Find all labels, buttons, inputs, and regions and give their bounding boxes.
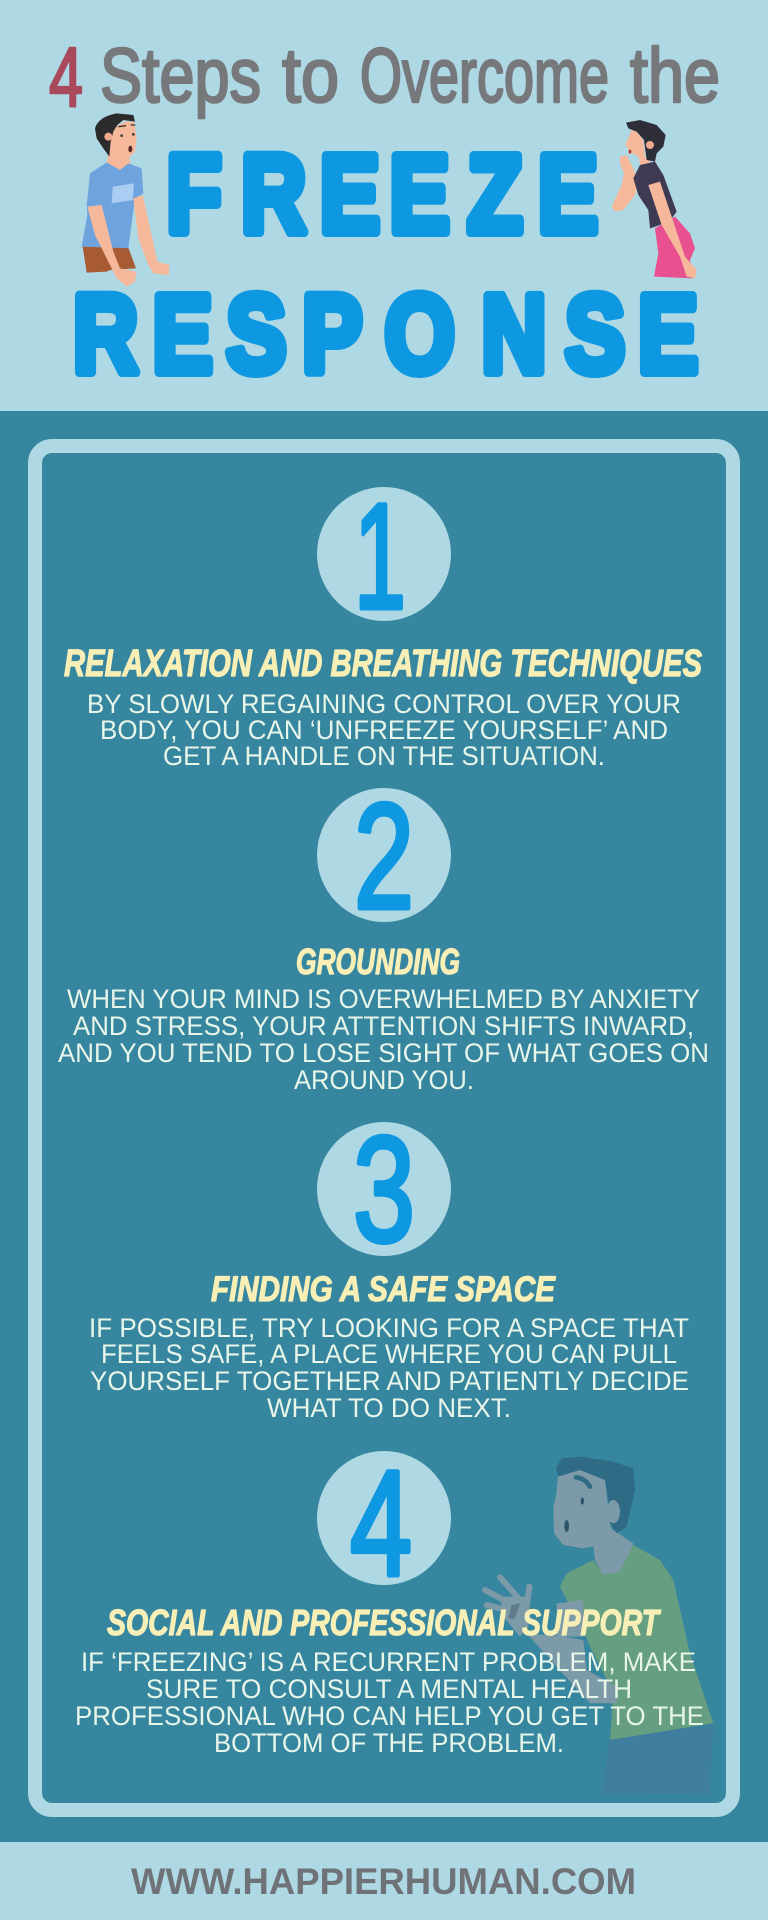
step 4 number badge: 4 (350, 1439, 412, 1607)
step 3 body: YOURSELF TOGETHER AND PATIENTLY DECIDE (90, 1366, 689, 1396)
step 1 body: BODY, YOU CAN ‘UNFREEZE YOURSELF’ AND (100, 715, 668, 745)
step 4 body: PROFESSIONAL WHO CAN HELP YOU GET TO THE (75, 1701, 704, 1731)
step 1 number badge: 1 (354, 472, 406, 640)
title line: 4 Steps to Overcome the: the (630, 33, 720, 119)
heading: FREEZE: FREEZE (166, 134, 598, 256)
header background (0, 0, 768, 411)
step 4 body (75, 1647, 704, 1758)
step 2 body: AND STRESS, YOUR ATTENTION SHIFTS INWARD, (73, 1011, 694, 1041)
step 1 body: BY SLOWLY REGAINING CONTROL OVER YOUR (87, 689, 681, 719)
step 2 number badge (317, 772, 451, 940)
title line: 4 Steps to Overcome the: Steps (100, 33, 261, 119)
footer website URL: WWW.HAPPIERHUMAN.COM (131, 1861, 636, 1902)
icon: surprised man in blue shirt (82, 113, 169, 287)
step 3 body: IF POSSIBLE, TRY LOOKING FOR A SPACE THAT (89, 1313, 689, 1343)
step 2 body (58, 984, 709, 1095)
step 2 number badge: 2 (354, 772, 414, 940)
title line: 4 Steps to Overcome the: to (282, 33, 339, 119)
step 1 body: GET A HANDLE ON THE SITUATION. (163, 741, 605, 771)
title line: 4 Steps to Overcome the: 4 (49, 30, 83, 124)
step 2 body: AROUND YOU. (294, 1065, 474, 1095)
step 2 body: WHEN YOUR MIND IS OVERWHELMED BY ANXIETY (67, 984, 700, 1014)
panel: rounded frame with steps (35, 446, 733, 1810)
step 4 body: BOTTOM OF THE PROBLEM. (214, 1728, 564, 1758)
title line: 4 Steps to Overcome the (49, 30, 720, 124)
step 1 body (87, 689, 681, 771)
step 3 number badge: 3 (353, 1105, 415, 1273)
step 4 body: SURE TO CONSULT A MENTAL HEALTH (146, 1674, 632, 1704)
step 2 heading: GROUNDING (296, 941, 460, 982)
step 3 body: WHAT TO DO NEXT. (267, 1393, 511, 1423)
main teal background (0, 411, 768, 1842)
title line: 4 Steps to Overcome the: Overcome (360, 33, 609, 119)
step 4 number badge (317, 1439, 451, 1607)
step 3 heading: FINDING A SAFE SPACE (211, 1270, 556, 1309)
step 1 number badge (317, 472, 451, 640)
step 3 number badge (317, 1105, 451, 1273)
step 3 body: FEELS SAFE, A PLACE WHERE YOU CAN PULL (101, 1339, 677, 1369)
step 3 body (89, 1313, 689, 1423)
step 2 body: AND YOU TEND TO LOSE SIGHT OF WHAT GOES ON (58, 1038, 709, 1068)
footer background (0, 1842, 768, 1920)
icon: thinking woman in pink pants (612, 120, 697, 278)
illustration: worried man behind step 4 (485, 1457, 713, 1795)
heading: RESPONSE: RESPONSE (73, 274, 698, 396)
step 4 body: IF ‘FREEZING’ IS A RECURRENT PROBLEM, MAKE (81, 1647, 696, 1677)
